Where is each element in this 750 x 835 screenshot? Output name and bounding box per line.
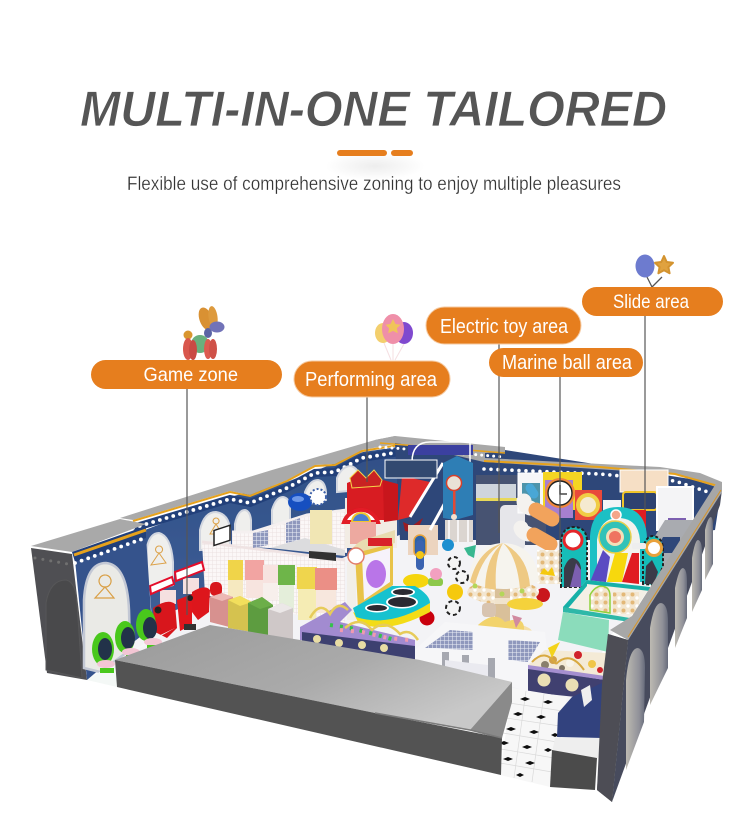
back-right wall — [375, 436, 722, 550]
balloon dog icon — [183, 305, 224, 360]
label: marine ball area: Marine ball area — [502, 352, 633, 374]
leader line: slide area — [644, 316, 646, 510]
ticket gate area — [415, 622, 548, 692]
game zone: red racing seats — [150, 562, 222, 638]
blue clock tower — [443, 456, 473, 542]
red slide structure — [383, 442, 473, 557]
label: game zone — [91, 360, 282, 389]
label: marine ball area — [489, 348, 643, 377]
leader line: performing area — [366, 397, 368, 482]
arch figure: small gold mark — [151, 546, 166, 565]
marine ball pit — [528, 642, 608, 700]
raised front platform — [115, 625, 512, 775]
game zone: fences — [202, 510, 347, 625]
performing area: dome, sign and rainbow — [288, 470, 398, 548]
toys and balls on floor — [403, 539, 476, 626]
mint play box — [558, 580, 650, 652]
label: performing area: Performing area — [305, 369, 438, 391]
performing area: cyan round stage — [353, 586, 430, 627]
leader line: electric toy area — [498, 344, 500, 533]
purple toy fence — [300, 602, 418, 660]
right outer wall — [597, 482, 722, 802]
title accent bars — [325, 150, 425, 180]
white arch on left wall — [84, 563, 130, 672]
electric toy area back frames — [518, 470, 700, 575]
wall arches — [147, 466, 360, 593]
label: electric toy area: Electric toy area — [440, 316, 569, 338]
slide area: teal arch and slides — [561, 507, 663, 587]
performing area: stage screen — [347, 530, 395, 620]
subtitle: Flexible use of comprehensive zoning to enjoy multiple pleasures — [127, 174, 621, 195]
right wall arches — [626, 517, 713, 770]
tiled entrance floor — [499, 688, 567, 787]
orange and white tube slide — [521, 488, 552, 544]
balloon and star icon — [636, 254, 673, 287]
label: performing area — [294, 361, 450, 397]
leader line: marine ball area — [559, 377, 561, 582]
game zone: claw machines back row — [228, 560, 337, 620]
playground isometric illustration — [31, 436, 722, 802]
leader line: game zone — [186, 389, 188, 615]
game zone: claw machines front row — [210, 593, 293, 640]
label: slide area — [582, 287, 723, 316]
back-left wall — [120, 436, 412, 620]
title: MULTI-IN-ONE TAILORED — [80, 81, 667, 137]
marine ball area: carousel — [467, 543, 561, 641]
arch gold figure — [95, 575, 114, 598]
label: game zone: Game zone — [144, 364, 238, 386]
label: electric toy area — [426, 307, 581, 344]
interior floor — [87, 440, 722, 760]
re-drawn end pier of right wall — [597, 634, 628, 802]
game zone: drum arcade machines — [87, 609, 175, 687]
left end wall — [31, 519, 152, 680]
label: slide area: Slide area — [613, 291, 689, 313]
blue reception desk — [552, 683, 602, 758]
balloon bunch icon — [375, 314, 413, 360]
front stub wall — [550, 750, 597, 790]
